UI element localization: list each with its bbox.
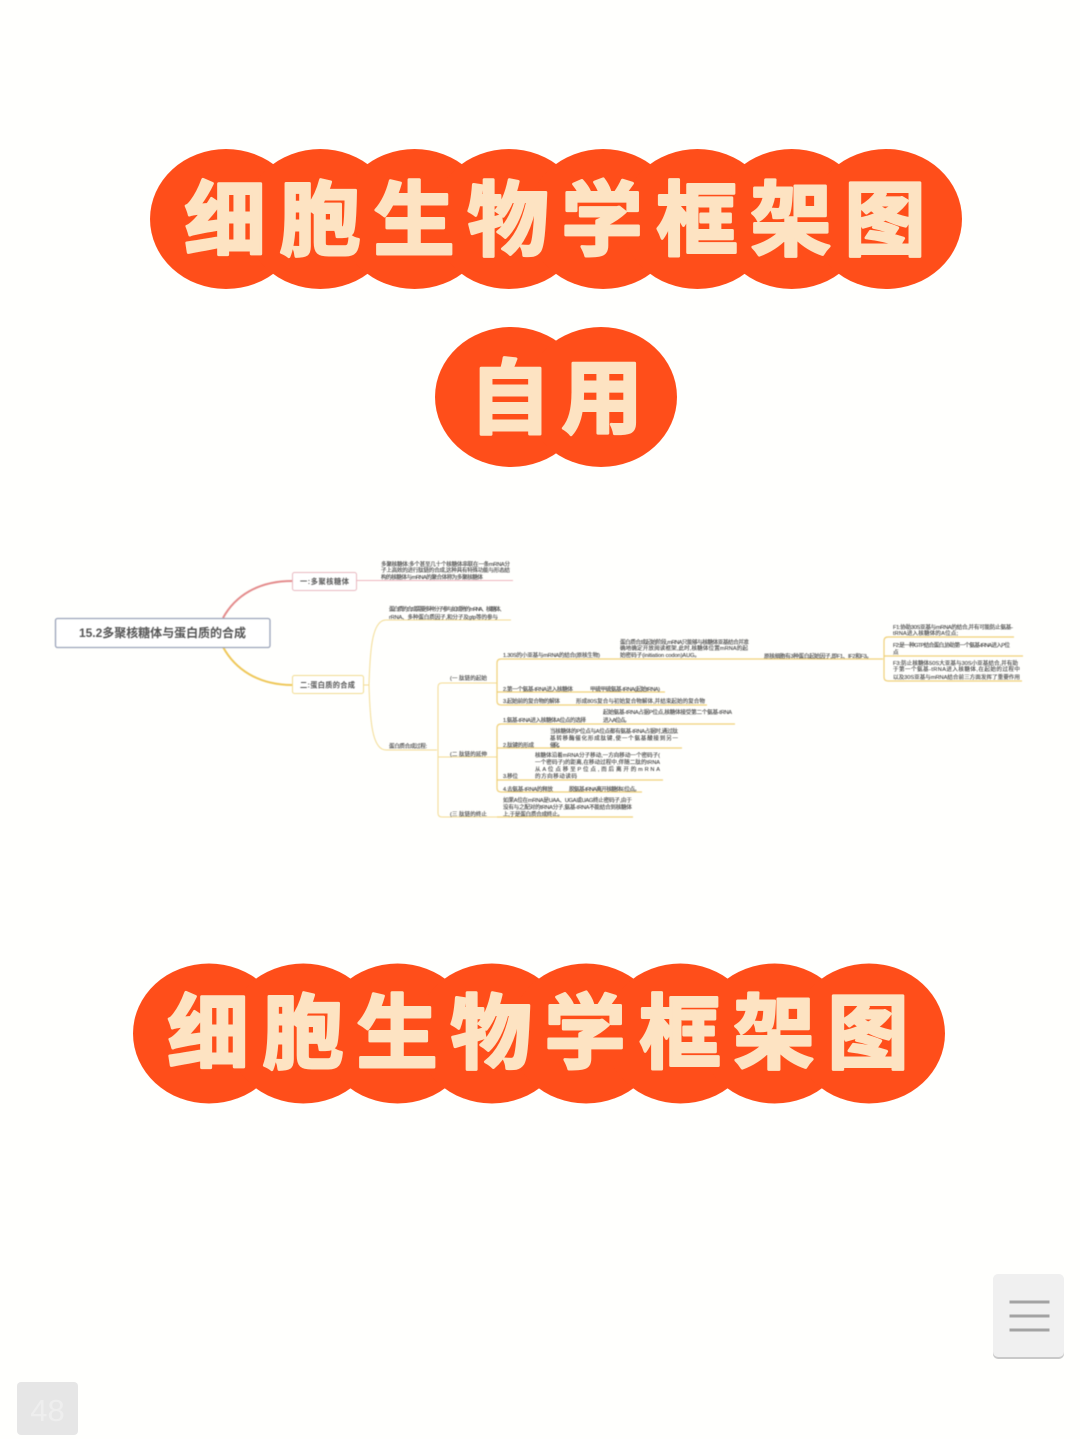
branch two: 蛋白质的合成 [292,605,511,750]
stage 2: 肽链的延伸: 起始氨基-tRNA占据P位点,核糖体接受第二个氨基-tRNA [603,708,732,716]
title banner: 细胞生物学框架图 [150,149,962,289]
repeated title banner: 细胞生物学框架图: 细 [167,990,249,1080]
stage 2: 肽链的延伸: 一个密码子)的距离,在移动过程中,伴随二肽的tRNA [535,758,660,766]
stage 1: 肽链的起始: 形成80S复合与初始复合物解体,并结束起始的复合物 [576,697,705,705]
stage 1: 肽链的起始: 始密码子(initiation codon)AUG。 [620,651,700,659]
branch two: 蛋白质的合成: 蛋白质合成过程: [389,742,427,750]
title banner: 细胞生物学框架图: 物 [467,177,549,267]
subtitle banner: 自用: 用 [561,355,643,445]
stage 1: 肽链的起始: 蛋白质合成起始阶段,mRNA只能够与核糖体亚基结合并准 [620,638,749,646]
title banner: 细胞生物学框架图: 图 [844,177,926,267]
initiation factors F1 F2 F3: 点 [893,649,899,656]
subtitle banner: 自用 [435,327,677,467]
stage 2: 肽链的延伸: 1.氨基-tRNA进入核糖体A位点的选择 [503,716,586,724]
stage 1: 肽链的起始: 2.第一个氨基-tRNA进入核糖体 [503,685,573,693]
page number badge: 48 [17,1382,78,1435]
branch two: 蛋白质的合成: 蛋白质的合成需要多种分子参与如成熟的mRNA、核糖体、 [389,605,505,613]
repeated title banner: 细胞生物学框架图: 学 [544,990,626,1080]
stage 1: 肽链的起始 [450,638,883,705]
stage 1: 肽链的起始: (一 肽链的起始 [450,674,487,682]
title banner: 细胞生物学框架图: 生 [373,177,455,267]
stage 3: 肽链的终止 [450,796,633,818]
stage 2: 肽链的延伸: 3.移位 [503,772,518,780]
initiation factors F1 F2 F3 [884,623,1023,681]
stage 2: 肽链的延伸: 2.肽键的形成 [503,741,534,749]
stage 2: 肽链的延伸 [450,708,735,793]
root connectors [223,581,292,685]
title banner: 细胞生物学框架图: 细 [184,177,266,267]
subtitle banner: 自用: 自 [469,355,551,445]
stage 2: 肽链的延伸: 进入A位点。 [603,716,630,724]
stage 1: 肽链的起始: 3.起始前的复合物的解体 [503,697,560,705]
branch one: 多聚核糖体: 多聚核糖体:多个甚至几十个核糖体串联在一条mRNA分 [381,560,510,568]
initiation factors F1 F2 F3: tRNA进入核糖体的A位点; [893,629,958,637]
repeated title banner: 细胞生物学框架图: 框 [639,990,721,1080]
repeated title banner: 细胞生物学框架图: 生 [356,990,438,1080]
page number badge: 48: 48 [30,1393,65,1428]
branch one: 多聚核糖体 [292,560,513,590]
stage 2: 肽链的延伸: 的方向移动读码 [535,772,577,780]
stage 3: 肽链的终止: (三 肽链的终止 [450,810,487,818]
initiation factors F1 F2 F3: F2:是一种GTP结合蛋白,协助第一个氨基-tRNA进入P位 [893,641,1010,649]
stage 2: 肽链的延伸: 当核糖体的P位点与A位点都有氨基-tRNA占据时,通过肽 [550,727,678,735]
repeated title banner: 细胞生物学框架图: 架 [733,990,815,1080]
stage 2: 肽链的延伸: 4.去氨基-tRNA的释放 [503,785,553,793]
stage 2: 肽链的延伸: 核糖体沿着mRNA分子移动,一方向移动一个密码子( [535,751,660,759]
stage connectors [438,683,503,817]
branch one: 多聚核糖体: 构的核糖体与mRNA的聚合体称为多聚核糖体 [381,573,483,581]
stage 1: 肽链的起始: 甲硫甲硫氨基-tRNA(起始tRNA) [590,685,660,693]
stage 2: 肽链的延伸: 从A位点移至P位点,而后离开的mRNA [535,765,660,773]
branch one: 多聚核糖体: 一:多聚核糖体 [300,577,350,586]
stage 3: 肽链的终止: 没有与之配对的tRNA分子,氨基-tRNA不能结合到核糖体 [503,803,632,811]
stage 2: 肽链的延伸: 基转移酶催化形成肽键,使一个氨基酸接到另一 [550,734,678,742]
title banner: 细胞生物学框架图: 学 [561,177,643,267]
stage 1: 肽链的起始: 确地确定开放阅读框架,此时,核糖体位置mRNA的起 [620,644,748,652]
branch two: 蛋白质的合成: rRNA、多种蛋白质因子,和分子及gtp等的参与 [389,613,498,621]
mind map [56,560,1023,818]
title banner: 细胞生物学框架图: 框 [656,177,738,267]
menu button icon [993,1274,1064,1359]
stage 3: 肽链的终止: 上,于是蛋白质合成终止。 [503,810,563,818]
initiation factors F1 F2 F3: F3:防止核糖体50S大亚基与30S小亚基结合,并有助 [893,659,1018,667]
repeated title banner: 细胞生物学框架图: 胞 [262,990,344,1080]
branch one: 多聚核糖体: 子上高效的进行肽链的合成,这种具有特殊功能与形态结 [381,566,510,574]
stage 2: 肽链的延伸: 催化。 [550,741,563,749]
stage 2: 肽链的延伸: 脱氨基-tRNA离开核糖体E位点。 [569,785,640,793]
initiation factors F1 F2 F3: 于第一个氨基-tRNA进入核糖体,在起始的过程中 [893,665,1020,673]
root node: 15.2多聚核糖体与蛋白质的合成 [56,618,270,648]
stage 1: 肽链的起始: 1.30S的小亚基与mRNA的结合(原核生物) [503,651,600,659]
repeated title banner: 细胞生物学框架图 [133,964,945,1104]
stage 1: 肽链的起始: 原核细胞有3种蛋白起始因子,即F1、IF2和F3。 [764,652,872,660]
initiation factors F1 F2 F3: 以及30S亚基与mRNA结合前三方面发挥了重要作用 [893,673,1020,681]
repeated title banner: 细胞生物学框架图: 图 [827,990,909,1080]
title banner: 细胞生物学框架图: 架 [750,177,832,267]
title banner: 细胞生物学框架图: 胞 [279,177,361,267]
stage 2: 肽链的延伸: (二 肽链的延伸 [450,750,487,758]
stage 3: 肽链的终止: 如果A位在mRNA是UAA、UGA或UAG终止密码子,由于 [503,796,632,804]
root node: 15.2多聚核糖体与蛋白质的合成: 15.2多聚核糖体与蛋白质的合成 [79,625,246,640]
initiation factors F1 F2 F3: F1:协助30S亚基与mRNA的结合,并有可能防止氨基- [893,623,1013,631]
branch two: 蛋白质的合成: 二:蛋白质的合成 [300,680,355,690]
repeated title banner: 细胞生物学框架图: 物 [450,990,532,1080]
